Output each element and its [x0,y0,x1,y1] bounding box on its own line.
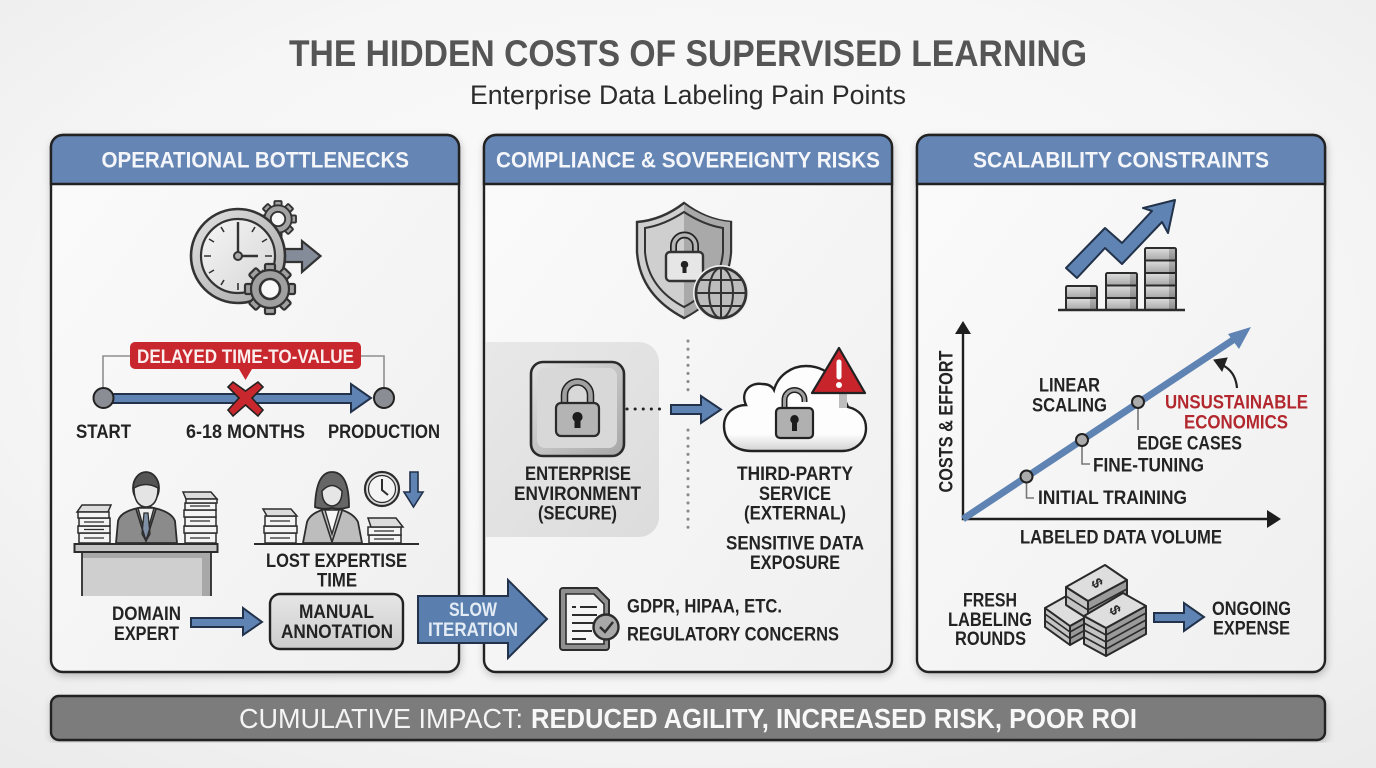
banner: cumulative impact: REDUCED AGILITY, INCREASED RISK, POOR ROI [531,703,1137,734]
label: linear scaling [1032,374,1107,416]
panel: scalability constraints [917,135,1325,672]
label: ongoing expense [1212,598,1291,640]
icon: stacks of money [1045,565,1146,656]
callout: unsustainable economics [1165,358,1308,434]
x axis label: LABELED DATA VOLUME [1020,526,1222,548]
arrow: to ongoing expense [1154,603,1204,631]
label: third-party service [737,463,853,524]
label: fresh labeling rounds: FRESH [963,590,1017,612]
panel header: compliance and sovereignty risks [484,135,892,184]
arrow: data leaves environment [671,396,721,423]
label: lost expertise time: TIME [317,570,357,592]
chart trend line [963,327,1251,519]
label: linear scaling: LINEAR [1039,374,1100,396]
chart: costs vs labeled data volume [936,321,1308,548]
icon: red cross [228,382,263,416]
icon: clock with gears and arrow [191,201,320,314]
callout: unsustainable economics: ECONOMICS [1184,412,1288,434]
box: manual annotation [270,594,403,649]
panel header: scalability constraints [917,135,1325,184]
label: production: PRODUCTION [328,421,440,443]
label: linear scaling: SCALING [1032,394,1107,416]
panel: operational bottlenecks [51,135,459,672]
label: domain expert: DOMAIN [112,603,181,625]
subtitle: Enterprise Data Labeling Pain Points [470,80,906,110]
arrow: expert to annotation [191,608,262,635]
text: regulatory concerns: GDPR, HIPAA, ETC. [627,596,782,618]
label: third-party service: (EXTERNAL) [744,502,846,524]
label: fresh labeling rounds: LABELING [948,609,1032,631]
label: initial training: INITIAL TRAINING [1038,487,1187,509]
label: sensitive data exposure [726,532,864,574]
box: manual annotation: MANUAL [299,601,374,623]
chart axes [955,321,1281,528]
title: THE HIDDEN COSTS OF SUPERVISED LEARNING [289,33,1087,74]
icon: stacks of money: $ [1105,602,1124,619]
timeline: start to production [76,342,440,443]
panel: compliance and sovereignty risks [484,135,892,672]
label: 6-18 months: 6-18 MONTHS [186,421,305,443]
text: regulatory concerns: REGULATORY CONCERNS [627,624,839,646]
label: edge cases: EDGE CASES [1137,432,1242,454]
banner: cumulative impact: CUMULATIVE IMPACT: [239,703,523,734]
label: ongoing expense: EXPENSE [1213,618,1290,640]
label: ongoing expense: ONGOING [1212,598,1291,620]
panel header: operational bottlenecks [51,135,459,184]
label: third-party service: SERVICE [759,483,831,505]
label: third-party service: THIRD-PARTY [737,463,853,485]
icon: compliance document [560,588,618,650]
label: sensitive data exposure: SENSITIVE DATA [726,532,864,554]
label: enterprise environment: ENTERPRISE [525,463,631,485]
illustration: domain expert at desk [74,472,218,596]
callout: delayed time-to-value [130,342,361,380]
icon: rising bars and arrow [1058,200,1185,310]
y axis label: COSTS & EFFORT [936,350,958,492]
chart leader lines [1026,408,1138,498]
icon: clock and down arrow [365,472,423,507]
label: domain expert: EXPERT [114,623,179,645]
icon: cloud with open lock and warning [724,348,866,451]
label: fine-tuning: FINE-TUNING [1093,454,1204,476]
box: manual annotation: ANNOTATION [281,621,393,643]
divider: dotted boundary [686,341,690,532]
label: enterprise environment [514,463,641,524]
panel header: operational bottlenecks: OPERATIONAL BOTTLENECKS [102,148,409,172]
label: sensitive data exposure: EXPOSURE [750,552,840,574]
callout: unsustainable economics: UNSUSTAINABLE [1165,392,1308,414]
label: fresh labeling rounds [948,590,1032,650]
label: enterprise environment: ENVIRONMENT [514,483,641,505]
icon: secure lock tile [531,362,624,456]
label: lost expertise time: LOST EXPERTISE [266,550,407,572]
banner: cumulative impact [51,696,1325,740]
illustration: expert with reduced time [254,472,423,544]
label: start: START [76,421,131,443]
chart data points [1020,396,1144,482]
callout: delayed time-to-value: DELAYED TIME-TO-VALUE [137,346,354,368]
text: regulatory concerns [627,596,839,646]
panel header: compliance and sovereignty risks: COMPLIANCE & SOVEREIGNTY RISKS [496,148,880,172]
label: domain expert [112,603,181,645]
label: fresh labeling rounds: ROUNDS [955,628,1026,650]
label: lost expertise time [266,550,407,592]
zone: enterprise environment [486,342,659,537]
panel header: scalability constraints: SCALABILITY CONSTRAINTS [973,148,1269,172]
connector: dotted data path [627,408,666,410]
arrow: slow iteration: SLOW [449,599,497,621]
icon: stacks of money: $ [1087,575,1106,592]
icon: shield with lock and globe [637,203,749,321]
arrow: slow iteration: ITERATION [428,619,518,641]
arrow: slow iteration [418,580,547,658]
label: enterprise environment: (SECURE) [538,502,617,524]
